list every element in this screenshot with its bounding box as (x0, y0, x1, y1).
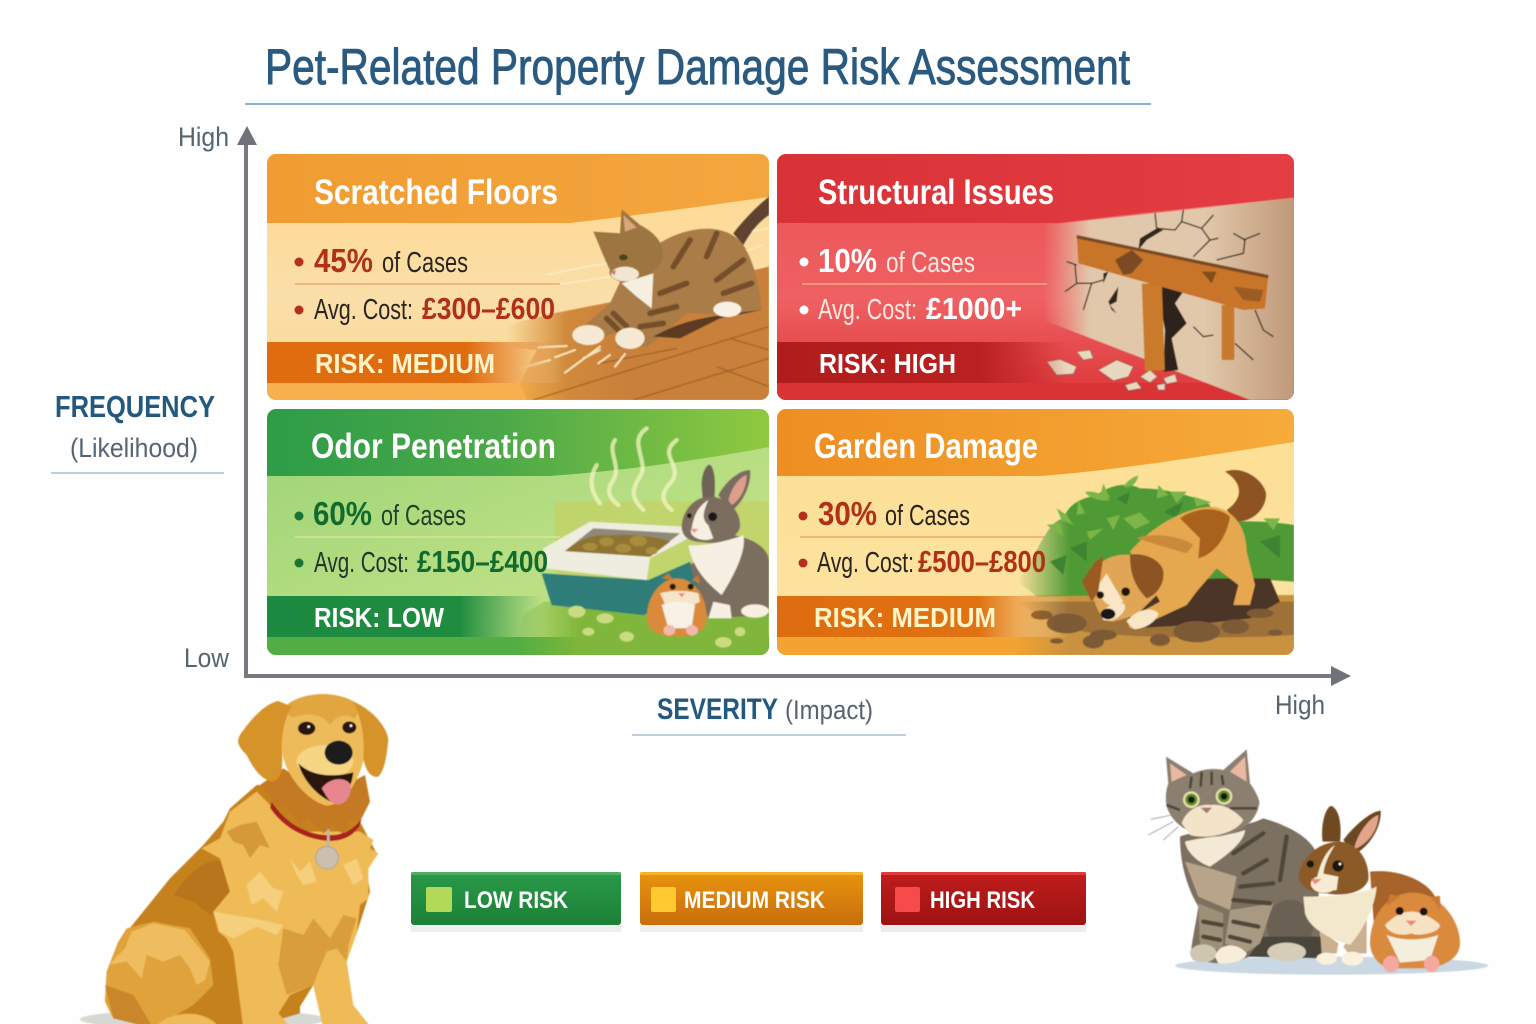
legend (411, 872, 1086, 932)
text: structural issues: RISK: HIGH (819, 348, 956, 379)
vertical axis: frequency: Low (184, 643, 229, 673)
text: garden damage: Garden Damage (814, 427, 1038, 466)
text: scratched floors: RISK: MEDIUM (315, 348, 495, 379)
legend item: low risk: LOW RISK (464, 887, 569, 914)
legend item: medium risk (640, 872, 863, 932)
text: garden damage (798, 427, 1046, 633)
text: scratched floors: £300–£600 (422, 291, 555, 326)
panel: scratched floors (267, 154, 769, 400)
text: garden damage: £500–£800 (918, 544, 1046, 579)
text: odor penetration: of Cases (381, 500, 466, 532)
horizontal axis: severity (246, 666, 1351, 735)
text: garden damage: 30% (818, 495, 877, 532)
legend item: low risk (411, 872, 621, 932)
legend item: medium risk: MEDIUM RISK (684, 887, 826, 914)
panel: odor penetration (267, 409, 769, 655)
vertical axis: frequency: FREQUENCY (55, 389, 215, 424)
illustration: litter box, rabbit and hamster (513, 428, 769, 655)
vertical axis: frequency: (Likelihood) (70, 433, 198, 463)
text: garden damage: RISK: MEDIUM (814, 602, 996, 633)
legend item: high risk: HIGH RISK (930, 887, 1036, 914)
illustration: cracked wall and beam (1043, 198, 1294, 400)
text: odor penetration (294, 427, 560, 633)
title: Pet-Related Property Damage Risk Assessment (265, 39, 1130, 95)
horizontal axis: severity: SEVERITY (657, 693, 778, 726)
text: structural issues: Structural Issues (818, 173, 1054, 212)
text: odor penetration: 60% (313, 495, 372, 532)
panel: structural issues (777, 154, 1294, 400)
text: structural issues: 10% (818, 242, 877, 279)
text: scratched floors (294, 173, 560, 379)
text: odor penetration: Odor Penetration (311, 427, 556, 466)
text: structural issues: Avg. Cost: (818, 294, 917, 326)
illustration: cat scratching floor (512, 196, 769, 400)
vertical axis: frequency (51, 122, 257, 678)
text: scratched floors: of Cases (382, 247, 468, 279)
text: structural issues: £1000+ (926, 291, 1022, 326)
text: odor penetration: £150–£400 (417, 544, 548, 579)
illustration: golden retriever (80, 694, 388, 1024)
vertical axis: frequency: High (178, 122, 229, 152)
text: scratched floors: Avg. Cost: (314, 294, 413, 326)
text: garden damage: Avg. Cost: (817, 547, 914, 579)
panel: garden damage (777, 409, 1294, 655)
text: structural issues (800, 173, 1054, 379)
horizontal axis: severity: High (1275, 690, 1325, 720)
horizontal axis: severity: (Impact) (785, 695, 873, 725)
illustration: cat, rabbit and hamster (1148, 749, 1488, 975)
illustration: puppy digging in garden (1017, 470, 1294, 655)
legend item: high risk (881, 872, 1086, 932)
text: odor penetration: RISK: LOW (314, 602, 444, 633)
text: structural issues: of Cases (886, 247, 975, 279)
text: odor penetration: Avg. Cost: (314, 547, 409, 579)
text: scratched floors: 45% (314, 242, 373, 279)
text: garden damage: of Cases (885, 500, 970, 532)
text: scratched floors: Scratched Floors (314, 173, 558, 212)
